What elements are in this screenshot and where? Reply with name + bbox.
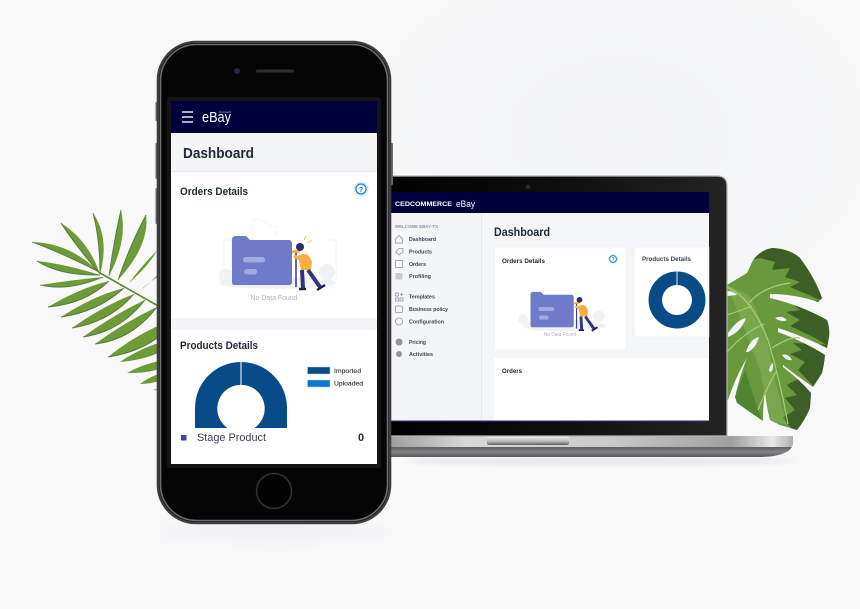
stage product row: 0 [358, 432, 364, 444]
chart legend: Uploaded [334, 380, 363, 388]
phone [156, 42, 393, 523]
laptop header bar [391, 192, 709, 213]
phone products details [180, 340, 364, 444]
laptop sidebar: Configuration [409, 320, 445, 326]
laptop page title: Dashboard [494, 227, 550, 239]
stage product row: Stage Product [197, 432, 266, 444]
laptop sidebar: Orders [409, 262, 426, 268]
phone screen [171, 101, 377, 464]
laptop sidebar: Activities [409, 352, 433, 358]
laptop sidebar: Profiling [409, 274, 432, 280]
phone orders details: No Data Found [250, 293, 298, 302]
phone speaker [256, 70, 294, 72]
laptop card: orders: Orders [502, 368, 522, 375]
chart legend: Imported [334, 368, 361, 375]
laptop card: orders details: Orders Details [502, 258, 545, 265]
laptop sidebar [391, 213, 482, 421]
chart legend [308, 367, 363, 388]
laptop camera [526, 185, 530, 189]
brand text: CEDCOMMERCE [395, 201, 453, 208]
laptop base [385, 436, 793, 457]
phone body [158, 42, 390, 523]
laptop lid and bezel [385, 176, 727, 436]
laptop card: orders details: ? [611, 257, 615, 263]
brand: eBay [202, 109, 231, 126]
phone side buttons [156, 102, 393, 224]
laptop header bar: eBay [456, 199, 475, 210]
empty state illustration [219, 219, 336, 290]
laptop card: products details: Products Details [642, 256, 691, 263]
phone camera [234, 68, 240, 74]
laptop empty state illustration [518, 292, 605, 332]
donut chart [195, 362, 287, 428]
icon: help: ? [359, 185, 364, 194]
laptop card: products details [634, 247, 709, 337]
phone header bar: Connect [219, 110, 231, 114]
laptop sidebar: Templates [409, 294, 435, 300]
laptop sidebar: Pricing [409, 340, 427, 346]
phone products details: Products Details [180, 340, 258, 352]
laptop screen [391, 192, 709, 422]
phone dashboard heading [171, 133, 377, 172]
phone header bar [171, 101, 377, 133]
phone orders details [180, 182, 368, 302]
laptop sidebar: Business policy [409, 307, 449, 313]
icon: hamburger menu [182, 112, 193, 122]
laptop sidebar: WELCOME EBAY-TS [395, 224, 438, 229]
infographic canvas [32, 40, 830, 524]
laptop sidebar: Products [409, 250, 432, 256]
phone home button [256, 474, 292, 508]
laptop card: orders [494, 358, 709, 421]
stage product row [181, 432, 364, 444]
laptop card: orders details: No Data Found [544, 332, 576, 338]
icon: help [354, 182, 368, 196]
palm leaf [32, 210, 165, 391]
phone dashboard heading: Dashboard [183, 146, 254, 162]
laptop card: orders details [494, 247, 626, 350]
phone orders details: Orders Details [180, 186, 248, 198]
monstera leaf [728, 248, 830, 430]
laptop sidebar: Dashboard [409, 237, 437, 243]
laptop [385, 176, 793, 457]
